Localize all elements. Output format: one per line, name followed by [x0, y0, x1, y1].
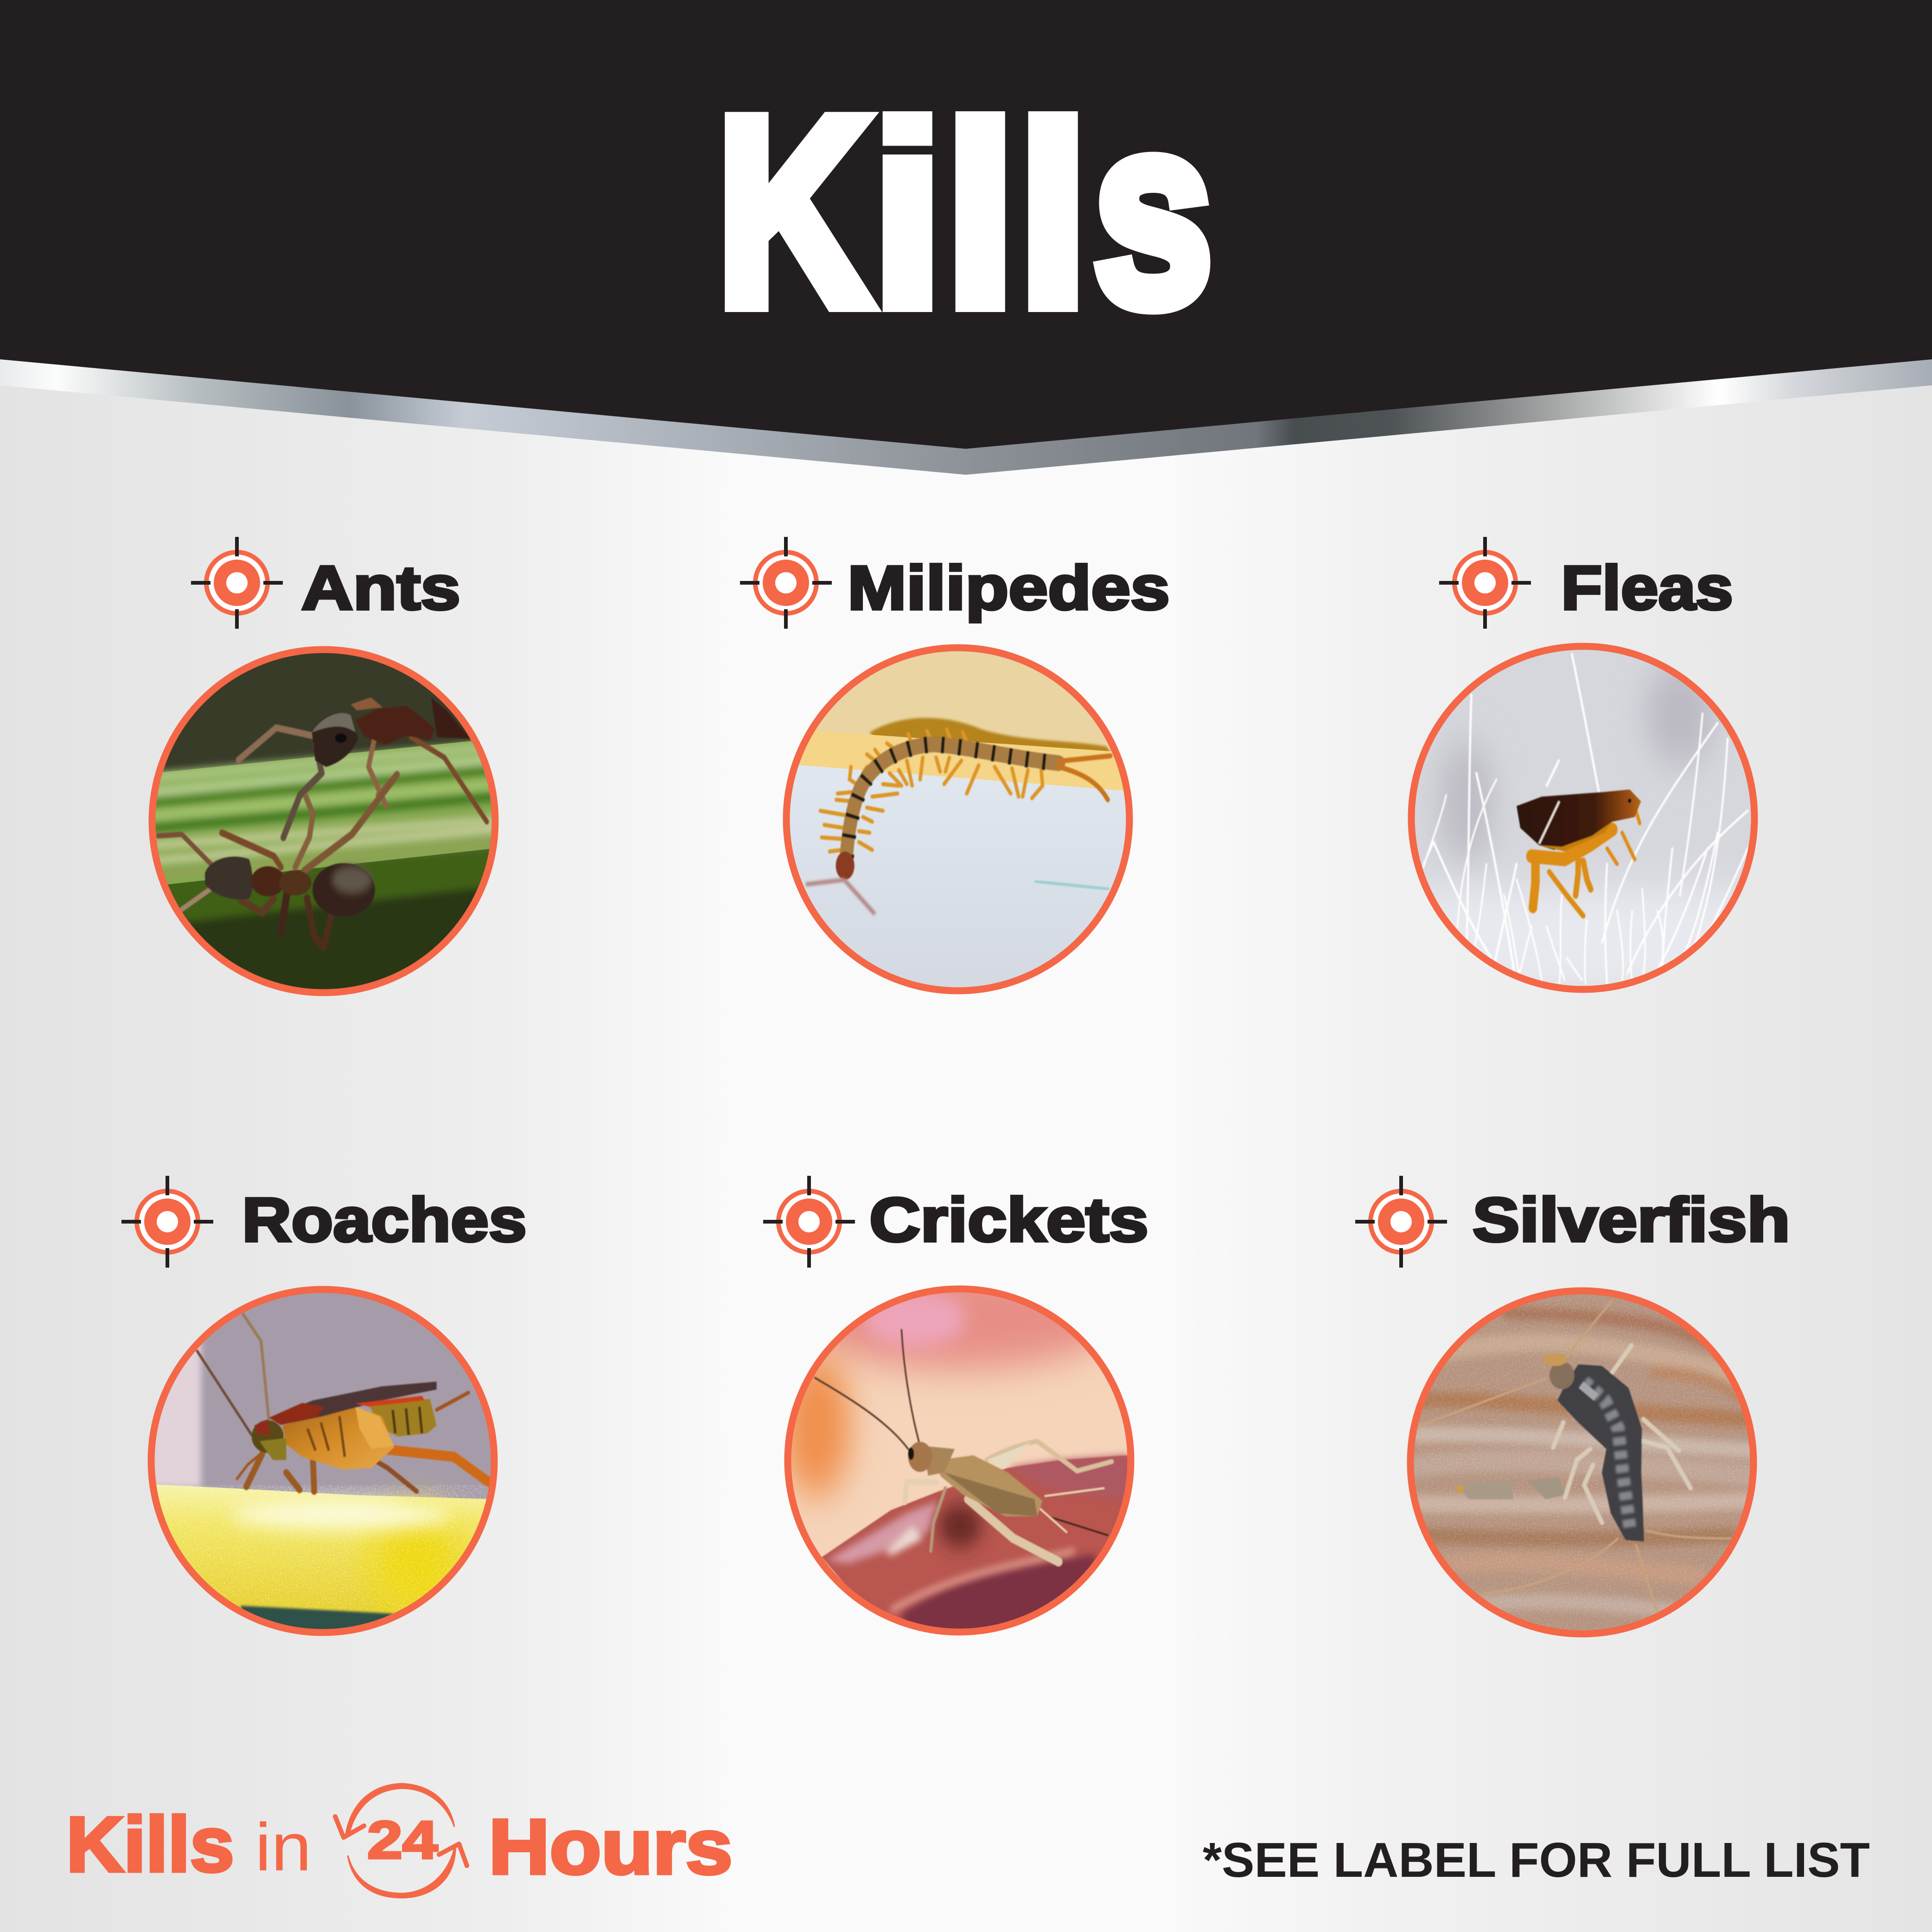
photo: flea on white hair	[1405, 640, 1762, 997]
panel: fleas	[1405, 537, 1762, 997]
icon: target	[121, 1176, 213, 1268]
panel: silverfish	[1355, 1176, 1790, 1641]
photo ring	[788, 1289, 1131, 1632]
label: crickets: Crickets	[869, 1186, 1148, 1255]
title: l	[1019, 62, 1088, 360]
icon: 24 hour arrows	[335, 1784, 467, 1898]
panel: crickets	[763, 1176, 1148, 1646]
icon: target	[1355, 1176, 1447, 1268]
footnote: *SEE LABEL FOR FULL LIST	[1203, 1833, 1870, 1887]
text: hours: Hours	[489, 1803, 733, 1890]
icon: target	[740, 537, 832, 629]
header banner	[0, 0, 1932, 449]
text: 24: 24	[367, 1811, 438, 1870]
label: fleas: Fleas	[1561, 554, 1733, 623]
panel: milipedes	[740, 537, 1170, 1001]
icon: target	[1439, 537, 1531, 629]
label: silverfish: Silverfish	[1473, 1186, 1790, 1255]
photo: cockroach on sponge	[144, 1284, 501, 1641]
photo: silverfish on stone	[1404, 1284, 1765, 1641]
label: milipedes: Milipedes	[848, 554, 1170, 623]
title: l	[946, 62, 1015, 360]
title: K	[717, 62, 870, 360]
icon: target	[191, 537, 283, 629]
photo: ants on green stem	[148, 644, 501, 999]
photo ring	[786, 648, 1129, 991]
photo ring	[1410, 1291, 1753, 1634]
silver chevron band	[0, 357, 1932, 475]
photo ring	[152, 650, 495, 993]
photo: cricket on branch	[779, 1262, 1145, 1646]
title: s	[1094, 62, 1212, 360]
icon: target	[763, 1176, 855, 1268]
label: ants: Ants	[301, 554, 460, 623]
panel: roaches	[121, 1176, 527, 1641]
title: i	[873, 62, 942, 360]
photo ring	[1411, 646, 1754, 989]
text: kills: Kills	[66, 1801, 234, 1888]
text: in: in	[255, 1809, 312, 1885]
label: roaches: Roaches	[242, 1186, 527, 1255]
panel: ants	[148, 537, 501, 999]
photo: millipede on ledge	[779, 640, 1141, 1001]
footer badge: kills in 24 hours	[66, 1784, 733, 1898]
photo ring	[151, 1289, 494, 1632]
